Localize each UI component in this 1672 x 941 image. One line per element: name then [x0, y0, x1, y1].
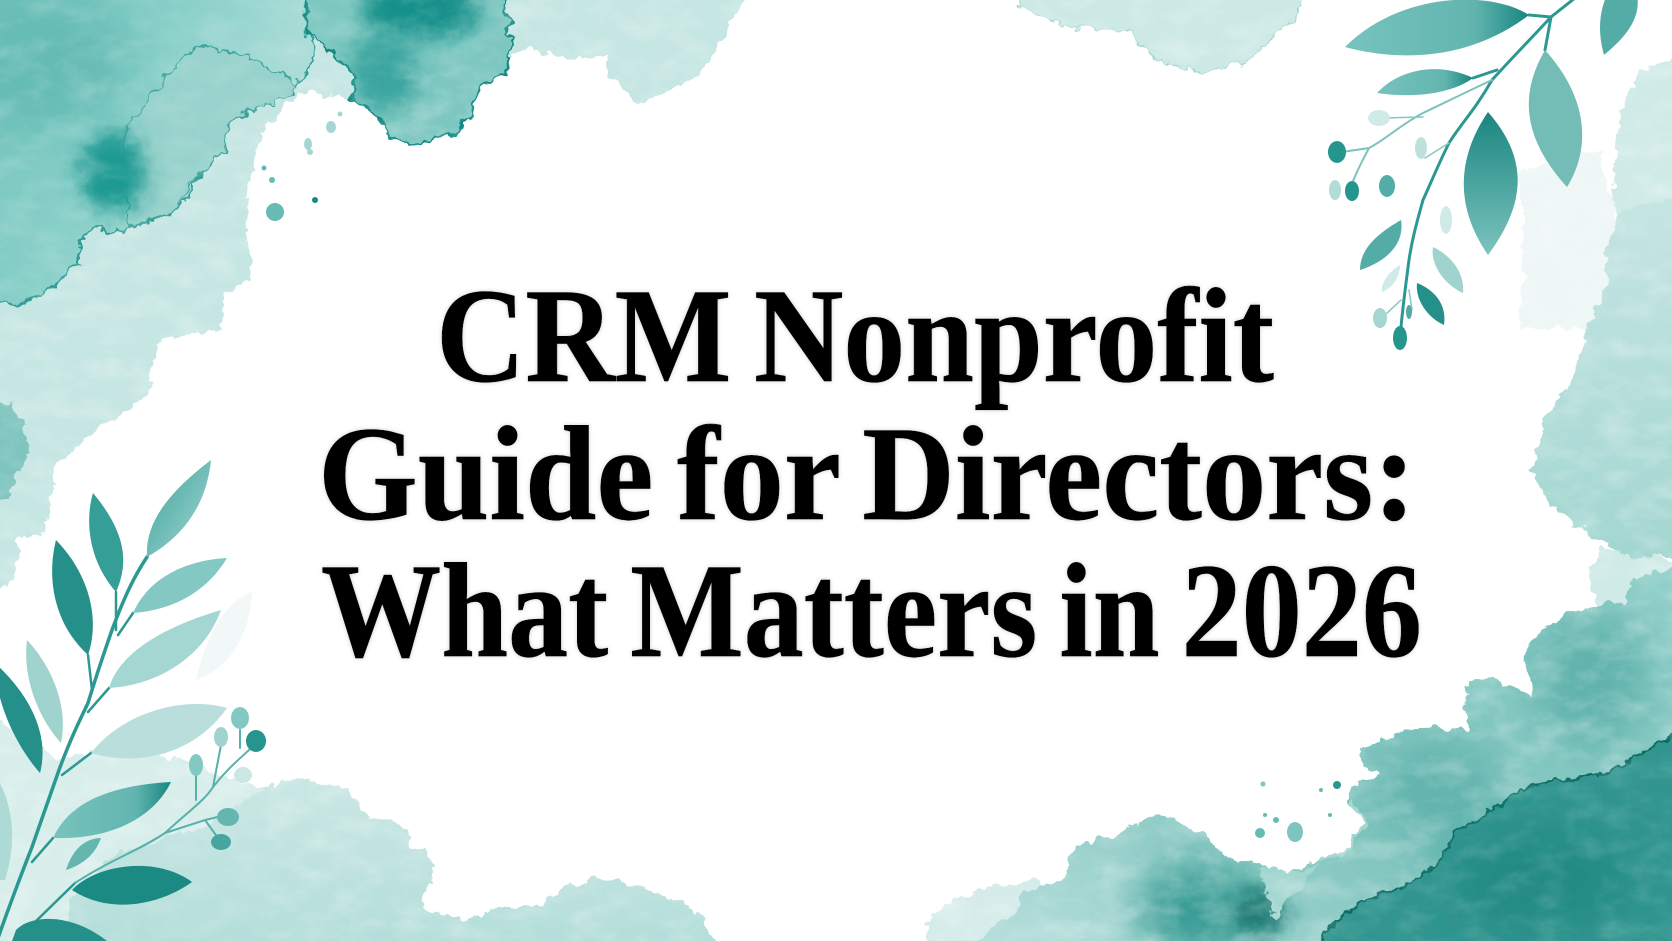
small leaf [66, 838, 101, 870]
paint spatter [1255, 781, 1341, 842]
leaf [12, 919, 107, 941]
leaf [0, 663, 43, 773]
lower pale join [1588, 545, 1672, 610]
watercolor wash: bottom-left [0, 592, 715, 941]
leaf [133, 558, 227, 613]
pale upper wash [1612, 57, 1672, 260]
mid wash [1532, 197, 1672, 558]
leaf [1433, 247, 1463, 293]
pale wash layer [0, 0, 763, 600]
dark teal blob [304, 0, 512, 145]
medium teal layer [980, 567, 1672, 941]
buds [189, 707, 266, 850]
leaf [91, 704, 227, 758]
pale teal layer [70, 777, 715, 941]
leaf [1360, 220, 1402, 270]
dark teal layer [1321, 737, 1672, 941]
botanical sprig: bottom-left [0, 460, 266, 941]
pale left leaf [0, 775, 12, 880]
title: Guide for Directors: [318, 400, 1416, 549]
leaf [72, 866, 192, 905]
leaf [26, 640, 63, 743]
leaf [1600, 0, 1638, 55]
faint outer wash [927, 880, 1040, 941]
very faint leaf ghosts [196, 592, 252, 680]
leaf [53, 782, 171, 838]
leaf [52, 540, 93, 655]
stems [1342, 0, 1575, 327]
medium teal layer [0, 0, 315, 305]
leaf [147, 460, 211, 557]
watercolor wash: left edge accent [0, 402, 29, 513]
leaf [1529, 50, 1582, 187]
leaf [89, 493, 123, 592]
leaf [1464, 112, 1518, 255]
very pale wash [1519, 150, 1625, 330]
title [318, 262, 1422, 686]
botanical sprig: top-right [1328, 0, 1638, 350]
watercolor wash: top-left [0, 0, 763, 600]
leaf [1377, 69, 1473, 95]
leaf [1417, 283, 1444, 325]
title: What Matters in 2026 [321, 537, 1422, 686]
pale wash behind leaves [0, 700, 267, 941]
paint spatter [262, 112, 342, 221]
watercolor wash: right side [1519, 57, 1672, 610]
watercolor wash: bottom-right [927, 567, 1672, 941]
title: CRM Nonprofit [436, 262, 1274, 411]
leaf [1345, 0, 1529, 55]
leaf [109, 610, 221, 688]
stems [0, 557, 256, 938]
pale leaf [1382, 265, 1400, 292]
watercolor wash: top centre-right [1017, 0, 1300, 72]
buds [1328, 110, 1452, 350]
